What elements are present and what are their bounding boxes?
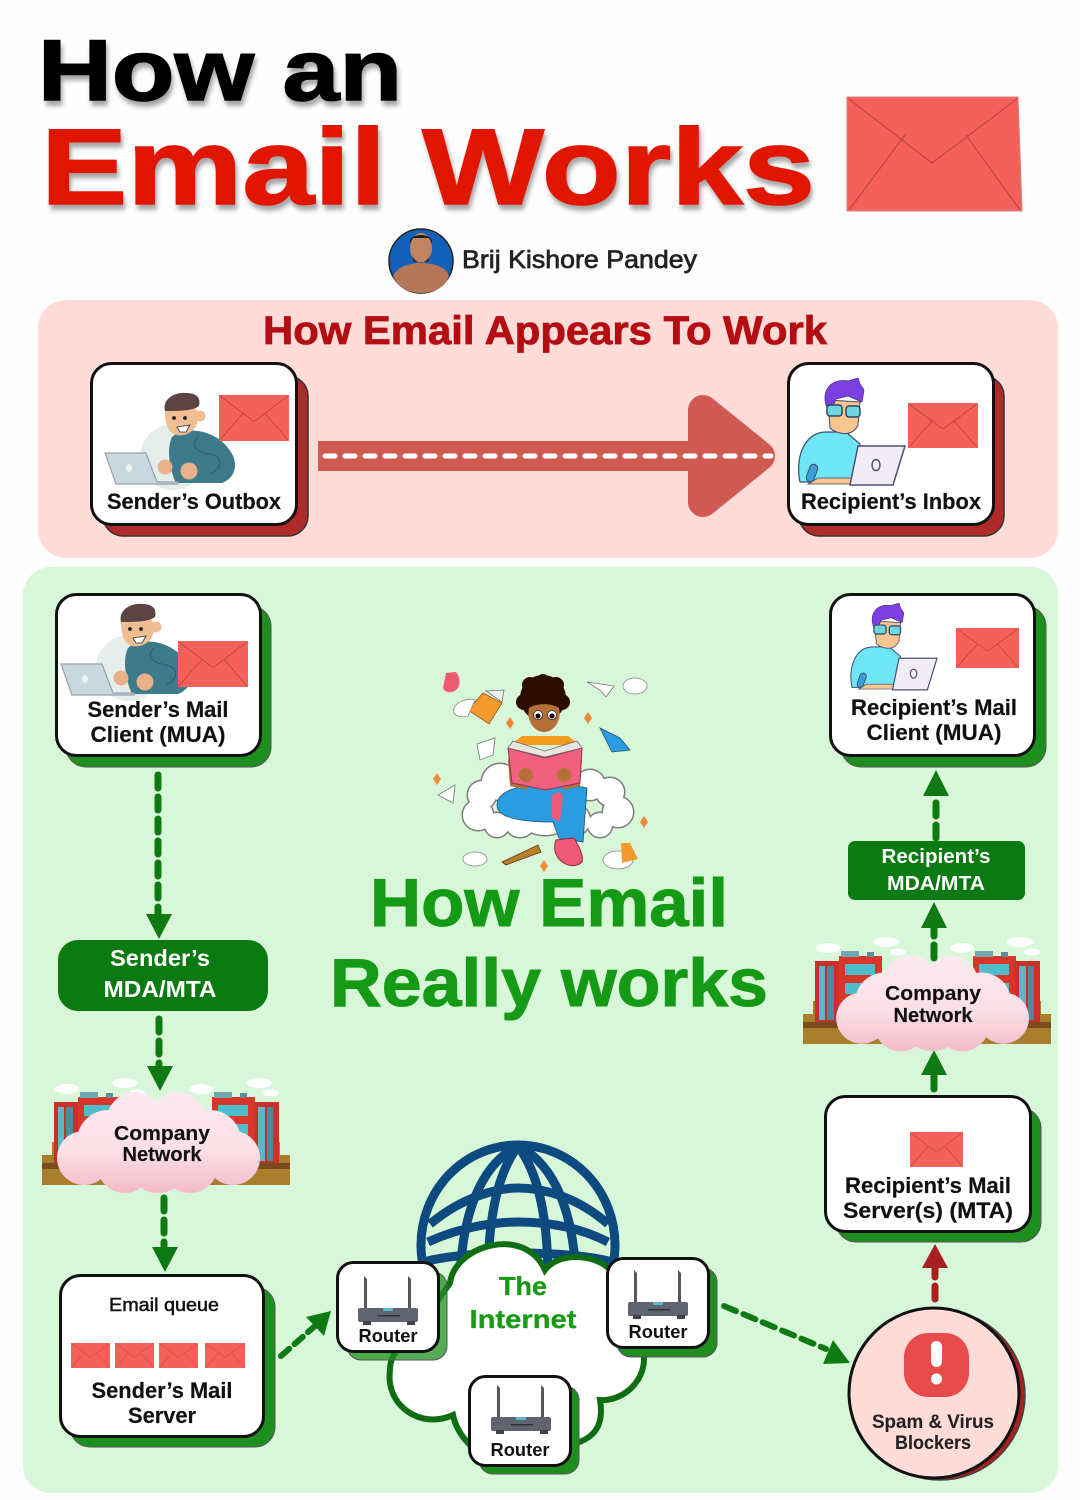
- heading: how email really works: [330, 865, 768, 1021]
- card: recipient's inbox: [788, 364, 1004, 536]
- legs: [497, 785, 587, 842]
- card: recipient's mail server: Server(s) (MTA): [843, 1198, 1013, 1223]
- icon: sender company network: Network: [122, 1143, 202, 1166]
- icon: warning: [904, 1333, 969, 1397]
- internet cloud: Internet: [470, 1304, 577, 1334]
- internet cloud: The: [499, 1271, 547, 1301]
- heading: how email really works: How Email: [370, 865, 728, 941]
- illustration: reading child: [433, 672, 648, 872]
- blue book: [600, 728, 630, 752]
- card: recipient's mail client: Client (MUA): [866, 720, 1002, 745]
- sparkles: [433, 712, 648, 872]
- title: Email Works: [41, 106, 815, 227]
- spam and virus blockers: Spam & Virus: [872, 1412, 994, 1433]
- card: sender's outbox: [92, 364, 308, 536]
- internet cloud: [390, 1244, 644, 1445]
- box: sender's MDA/MTA: MDA/MTA: [104, 976, 216, 1002]
- card: recipient's inbox: Recipient’s Inbox: [801, 489, 982, 514]
- icon: recipient company network: Company: [885, 982, 982, 1005]
- title: How an: [38, 23, 402, 119]
- arrow: direct delivery: [318, 410, 771, 502]
- router: left: [338, 1262, 447, 1360]
- icon: author avatar: [389, 229, 453, 293]
- paper planes: [587, 682, 614, 697]
- orange book: [468, 693, 502, 724]
- spam and virus blockers: [849, 1308, 1025, 1480]
- heading: How Email Appears To Work: [263, 309, 828, 353]
- arrow: MDA to recipient client: [923, 770, 949, 838]
- card: sender's mail server: [60, 1276, 275, 1447]
- arrow: router to spam blockers: [724, 1306, 850, 1364]
- icon: sender company network: [42, 1078, 290, 1193]
- panel: how email appears to work: [38, 300, 1058, 558]
- arrow: company network to MDA: [921, 902, 947, 958]
- open book: [508, 748, 582, 790]
- arrow: mail server to company network: [921, 1050, 947, 1089]
- box: recipient's MDA/MTA: Recipient’s: [882, 846, 990, 868]
- card: sender's mail server: Email queue: [109, 1295, 219, 1315]
- author credit: [389, 229, 698, 293]
- icon: sender company network: Company: [114, 1122, 211, 1145]
- pencil: [502, 845, 541, 865]
- router: bottom: Router: [490, 1440, 550, 1460]
- router: right: [608, 1258, 717, 1357]
- arrow: MDA to company network: [147, 1019, 173, 1091]
- card: sender's mail client: [56, 594, 271, 767]
- arrow: queue to router: [281, 1311, 331, 1356]
- card: sender's mail client: Sender’s Mail: [88, 697, 228, 722]
- card: sender's outbox: Sender’s Outbox: [107, 489, 282, 514]
- spam and virus blockers: Blockers: [895, 1433, 971, 1454]
- head: [516, 674, 570, 721]
- author credit: Brij Kishore Pandey: [462, 246, 698, 274]
- title: [38, 23, 815, 227]
- card: recipient's mail server: [826, 1096, 1041, 1242]
- card: recipient's mail client: Recipient’s Mail: [851, 695, 1017, 720]
- heading: how email really works: Really works: [330, 945, 768, 1021]
- panel: how email really works: [23, 567, 1058, 1493]
- router: right: Router: [628, 1322, 688, 1342]
- arrow: company network to queue: [152, 1198, 178, 1272]
- arrow: blockers to mail server: [922, 1244, 948, 1299]
- icon: globe: [421, 1145, 615, 1345]
- torso: [510, 736, 580, 745]
- small clouds: [454, 699, 475, 717]
- box: recipient's MDA/MTA: [848, 841, 1025, 900]
- box: sender's MDA/MTA: [58, 940, 268, 1011]
- router: left: Router: [358, 1326, 418, 1346]
- router: bottom: [470, 1376, 579, 1474]
- card: sender's mail client: Client (MUA): [90, 722, 226, 747]
- icon: large envelope: [847, 97, 1022, 211]
- arrow: client to MDA: [146, 775, 172, 939]
- card: recipient's mail server: Recipient’s Mail: [845, 1173, 1011, 1198]
- card: sender's mail server: Server: [128, 1403, 196, 1428]
- white cloud: [463, 764, 633, 837]
- icon: recipient company network: Network: [894, 1004, 973, 1027]
- card: recipient's mail client: [830, 594, 1046, 767]
- box: sender's MDA/MTA: Sender’s: [110, 945, 210, 971]
- card: sender's mail server: Sender’s Mail: [92, 1378, 232, 1403]
- letters: [443, 672, 459, 692]
- icon: recipient company network: [803, 937, 1051, 1051]
- box: recipient's MDA/MTA: MDA/MTA: [887, 873, 985, 895]
